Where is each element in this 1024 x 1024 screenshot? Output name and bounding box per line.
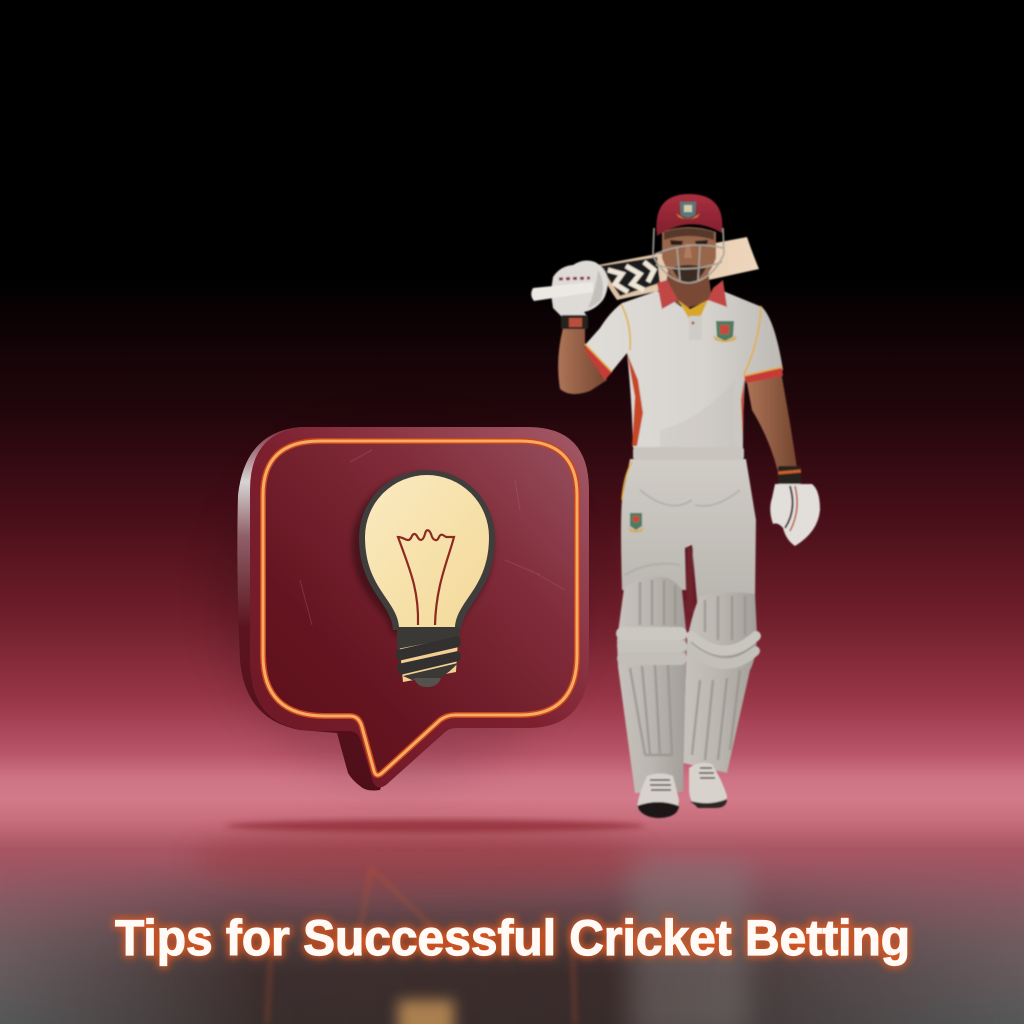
raised arm [558,326,607,394]
cricket player [531,194,820,818]
helmet shell [656,194,722,236]
right leg pad [683,592,757,773]
bubble neon ring [263,441,577,775]
speech bubble with light bulb [215,420,589,790]
shirt side panels [627,353,643,446]
helmet crest [680,202,696,218]
bubble shadow [215,420,585,780]
bubble 3D side [237,427,420,790]
bubble face [263,441,577,775]
neck [664,270,712,308]
batting glove, top hand [531,261,608,329]
bulb screw base [396,627,461,687]
batting glove, lower hand [770,466,820,546]
left shoe [637,774,679,818]
left leg pad [616,577,687,793]
bulb filament [398,530,454,625]
lowered arm [746,372,797,472]
floor reflections [49,816,950,1024]
title: Tips for Successful Cricket Betting [115,910,910,966]
title: Tips for Successful Cricket Betting [115,910,910,966]
helmet grille [653,228,724,283]
placket [689,316,702,340]
right shoe [689,763,727,808]
sleeve trims [585,345,612,380]
shirt [585,280,783,448]
trousers [621,459,756,612]
icon: light bulb [352,470,495,687]
head and helmet [653,194,724,284]
bat [598,237,759,300]
shirt crest [713,321,737,342]
waistband [633,447,744,460]
trouser crest [628,513,644,532]
scratches [300,450,565,625]
shirt collar [657,280,678,309]
bubble rim [250,427,589,787]
